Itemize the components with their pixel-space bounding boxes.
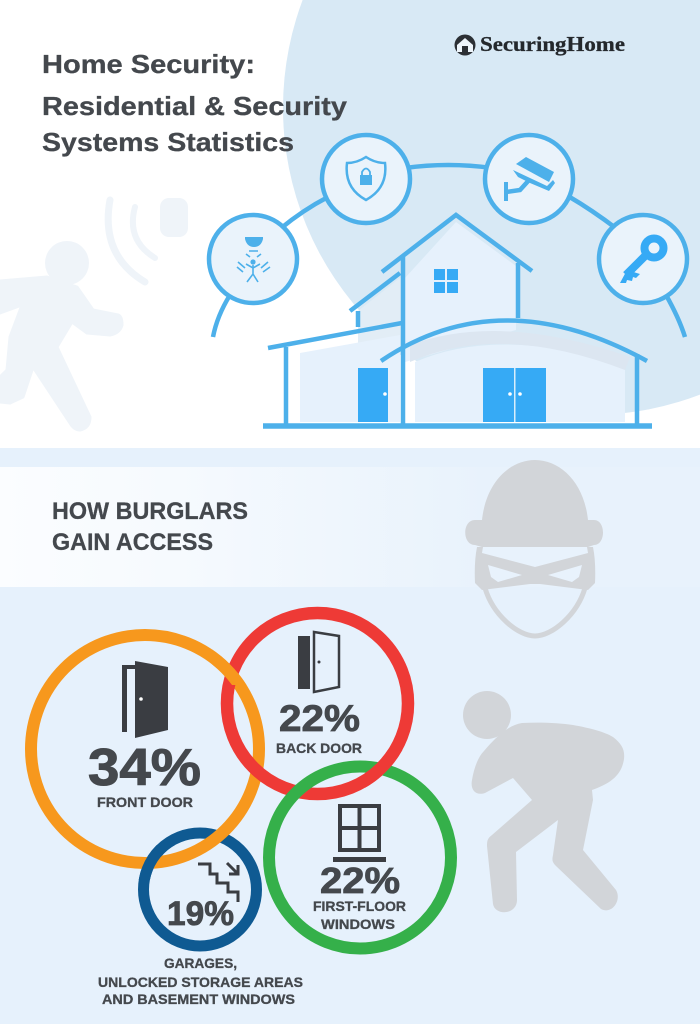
stat: first-floor windows: WINDOWS <box>321 916 395 932</box>
icon: motion sensor <box>209 215 297 303</box>
panel: hero <box>0 0 700 430</box>
stat: back door <box>276 632 362 756</box>
stat: first-floor windows <box>313 806 406 932</box>
background circle <box>283 0 700 415</box>
section background <box>0 448 700 1024</box>
heading: HOW BURGLARS <box>52 498 248 525</box>
heading: GAIN ACCESS <box>52 529 213 556</box>
icon: front door <box>122 661 168 738</box>
faded running figure and motion sensor <box>0 198 188 430</box>
title <box>42 49 348 157</box>
icon: back door <box>298 632 339 692</box>
door: double <box>483 368 546 422</box>
stat: garages: GARAGES, <box>164 956 237 971</box>
title: Home Security: <box>42 49 255 79</box>
title: Residential & Security <box>42 91 348 121</box>
icon: masked burglar <box>465 460 603 636</box>
stat: front door: FRONT DOOR <box>97 794 193 810</box>
icon: burglar carrying sack <box>463 691 624 912</box>
house <box>263 215 652 426</box>
stat: garages: UNLOCKED STORAGE AREAS <box>98 975 303 990</box>
icon: shield lock <box>322 135 410 223</box>
icon: security camera <box>485 135 573 223</box>
chart: overlapping rings <box>31 613 451 948</box>
stat: back door: BACK DOOR <box>276 740 362 756</box>
icon: window <box>333 806 386 862</box>
connecting arcs <box>213 165 685 337</box>
logo: SecuringHome: SecuringHome <box>480 32 625 56</box>
stat: garages <box>98 863 303 1007</box>
stat: first-floor windows: FIRST-FLOOR <box>313 898 406 914</box>
stat: garages: AND BASEMENT WINDOWS <box>102 992 295 1007</box>
title: Systems Statistics <box>42 127 294 157</box>
door: side <box>358 368 388 422</box>
stat: back door: 22% <box>279 698 360 739</box>
heading <box>52 498 248 556</box>
stat: first-floor windows: 22% <box>320 860 400 901</box>
stat: garages: 19% <box>167 895 234 933</box>
icon: key <box>599 215 687 303</box>
panel: how burglars gain access <box>0 448 700 1024</box>
stat: front door <box>88 661 201 810</box>
stat: front door: 34% <box>88 739 201 797</box>
window <box>434 269 458 293</box>
icon: stairs <box>198 863 238 902</box>
heading band <box>0 467 700 587</box>
